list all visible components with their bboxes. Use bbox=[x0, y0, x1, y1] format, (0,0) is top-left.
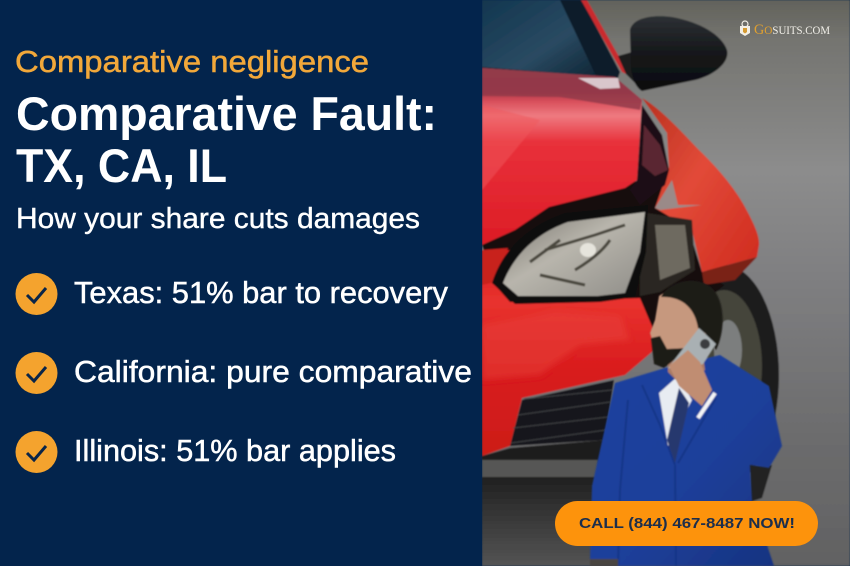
icon: shield lock bbox=[740, 21, 750, 36]
wheel and tyre bbox=[669, 265, 779, 502]
list item: Texas: Texas: 51% bar to recovery bbox=[74, 275, 448, 310]
bumper grille bbox=[510, 380, 614, 446]
logo: GOSUITS.COM bbox=[754, 22, 830, 38]
man in blue suit on phone bbox=[590, 281, 782, 566]
eyebrow heading: Comparative negligence bbox=[15, 45, 369, 79]
subtitle: How your share cuts damages bbox=[16, 203, 420, 235]
icon: check badge bbox=[16, 431, 58, 473]
list item: California: California: pure comparative bbox=[74, 354, 472, 389]
engine gap bbox=[630, 105, 669, 205]
dark engine bay behind panels bbox=[482, 170, 725, 340]
call to action button: CALL (844) 467-8487 NOW! bbox=[579, 516, 795, 532]
phone bbox=[668, 328, 716, 370]
car bumper bbox=[482, 250, 660, 456]
arm and lapel shadows bbox=[618, 385, 716, 566]
suit bbox=[590, 355, 782, 566]
list item: Illinois: Illinois: 51% bar applies bbox=[74, 433, 396, 468]
hair bbox=[661, 281, 723, 350]
side mirror bbox=[618, 16, 727, 91]
tie bbox=[667, 388, 689, 463]
lower bumper bbox=[482, 440, 605, 478]
face bbox=[650, 290, 708, 366]
fender crease detail bbox=[655, 180, 702, 210]
shirt cuff bbox=[698, 393, 715, 418]
headlight bbox=[492, 205, 695, 304]
photo: damaged red car on road bbox=[482, 0, 850, 566]
beard bbox=[651, 336, 688, 368]
call to action button bbox=[555, 501, 818, 546]
neck bbox=[668, 335, 705, 384]
hand bbox=[669, 350, 712, 406]
shirt bbox=[659, 376, 692, 446]
car hood bbox=[482, 68, 642, 245]
car windshield bbox=[482, 0, 630, 78]
panel: navy text panel bbox=[0, 0, 482, 566]
list item: Illinois bbox=[16, 431, 396, 473]
title bbox=[16, 87, 437, 192]
car fender bbox=[642, 98, 759, 272]
watch bbox=[590, 559, 618, 566]
title: Comparative Fault: bbox=[16, 87, 437, 140]
title: TX, CA, IL bbox=[16, 139, 227, 192]
icon: check badge bbox=[16, 273, 58, 315]
icon: check badge bbox=[16, 352, 58, 394]
